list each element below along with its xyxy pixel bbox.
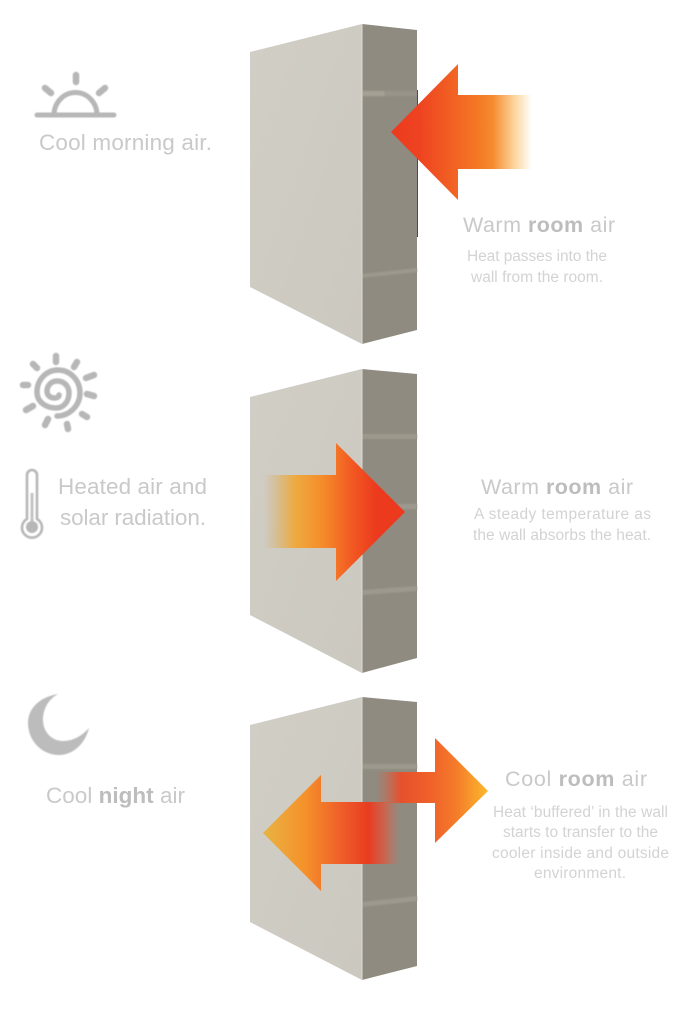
- heading: warm room air: Warm room air: [481, 475, 633, 499]
- label: cool morning air: Cool morning air.: [39, 130, 212, 155]
- panel: cool morning: [37, 24, 615, 344]
- description: steady temperature: A steady temperature as: [474, 506, 651, 523]
- description: buffered heat transfer: starts to transfer to the: [503, 824, 658, 841]
- description: heat passes into wall: [467, 248, 607, 286]
- heading: warm room air: Warm room air: [463, 213, 615, 237]
- icon: thermometer: [22, 470, 42, 538]
- icon: crescent moon: [28, 694, 89, 755]
- icon: sunrise: [37, 75, 114, 115]
- description: steady temperature: [473, 506, 651, 544]
- description: heat passes into wall: Heat passes into the: [467, 248, 607, 265]
- icon: spiral sun: [23, 356, 94, 429]
- panel: cool night: [28, 694, 669, 980]
- wall: morning: [250, 24, 418, 344]
- description: buffered heat transfer: Heat ‘buffered’ in the wall: [493, 804, 668, 821]
- description: buffered heat transfer: environment.: [534, 865, 626, 882]
- label: heated air and solar radiation: solar radiation.: [60, 505, 206, 530]
- arrow: heat released outdoors: [263, 775, 402, 891]
- arrow: heat released to the room: [376, 738, 488, 843]
- heading: cool room air: Cool room air: [505, 767, 647, 791]
- panel: hot day: [22, 356, 651, 673]
- wall: night: [250, 697, 417, 980]
- arrow: heat entering wall from room: [391, 64, 532, 200]
- description: heat passes into wall: wall from the room.: [470, 269, 603, 286]
- wall: day: [250, 369, 417, 673]
- label: cool night air: Cool night air: [46, 783, 186, 808]
- description: buffered heat transfer: cooler inside and outside: [492, 845, 669, 862]
- label: heated air and solar radiation: [58, 474, 207, 530]
- description: steady temperature: the wall absorbs the heat.: [473, 527, 651, 544]
- arrow: heat absorbed by wall: [263, 443, 405, 581]
- description: buffered heat transfer: [492, 804, 669, 882]
- label: heated air and solar radiation: Heated air and: [58, 474, 207, 499]
